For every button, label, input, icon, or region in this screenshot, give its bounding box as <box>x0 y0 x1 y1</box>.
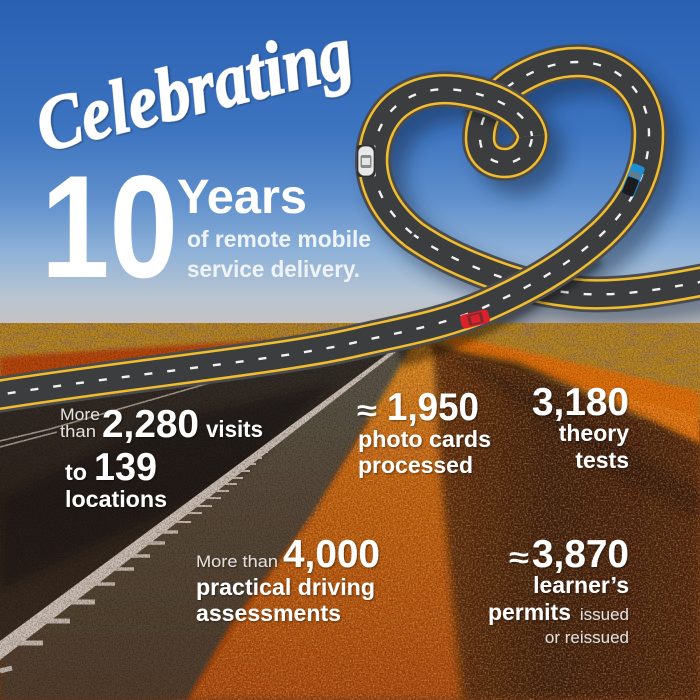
stat: practical driving assessments: More than <box>196 552 278 571</box>
stat: photo cards: processed <box>358 452 473 478</box>
stat: visits and locations: 2,280 <box>102 403 199 446</box>
subtitle: service delivery. <box>187 256 360 282</box>
stat: learner's permits: 3,870 <box>532 533 629 576</box>
dark tyre patch <box>0 385 330 590</box>
stat: photo cards: 1,950 <box>387 386 479 429</box>
road tail segment <box>373 160 700 294</box>
stat: learner's permits: permits <box>488 599 571 625</box>
stat: photo cards: ≈ <box>357 395 377 426</box>
subtitle <box>187 226 371 282</box>
stat: theory tests: 3,180 <box>532 381 629 424</box>
heading: Years: Years <box>177 171 307 224</box>
stat: theory tests: theory <box>559 420 629 446</box>
stat: visits and locations: visits <box>206 416 263 442</box>
icon: blue truck <box>621 163 645 197</box>
stat: learner's permits: ≈ <box>509 542 529 573</box>
stat: visits and locations <box>60 403 263 512</box>
stat: theory tests <box>532 381 629 473</box>
rumble strips <box>0 428 296 671</box>
stat: photo cards: photo cards <box>358 426 491 452</box>
dark gravel track <box>428 342 700 700</box>
stat: practical driving assessments: practical driving <box>196 574 375 600</box>
subtitle: of remote mobile <box>187 226 371 252</box>
stat: learner's permits: learner’s <box>533 572 629 598</box>
stat: visits and locations: More <box>60 405 100 424</box>
stat: visits and locations: 139 <box>94 446 157 489</box>
asphalt road <box>0 345 412 700</box>
stat: learner's permits: issued <box>580 605 629 624</box>
stat: practical driving assessments <box>196 533 380 626</box>
upper left lobe road segment <box>373 89 532 235</box>
stat: practical driving assessments: 4,000 <box>283 533 380 576</box>
orange gravel verge <box>170 345 460 700</box>
stat: learner's permits: or reissued <box>545 628 629 647</box>
scrub mottling <box>0 323 700 413</box>
road shadow <box>0 76 700 411</box>
icon: white car <box>357 145 375 177</box>
stat: visits and locations: locations <box>65 486 167 512</box>
icon: red car <box>459 309 491 329</box>
orange dirt band <box>440 336 700 445</box>
heading: Celebrating: Celebrating <box>28 9 361 168</box>
heading: 10: 10 <box>41 145 178 308</box>
stat: theory tests: tests <box>575 447 629 473</box>
stat: learner's permits <box>488 533 629 647</box>
stat: visits and locations: than <box>60 422 96 441</box>
stat: visits and locations: to <box>65 459 87 485</box>
white edge line <box>0 352 396 660</box>
centre road lines <box>0 382 213 447</box>
stat: photo cards <box>357 386 491 478</box>
main road segment <box>0 62 649 397</box>
heart-shaped road <box>0 62 700 397</box>
stat: practical driving assessments: assessments <box>196 600 341 626</box>
sky background <box>0 0 700 324</box>
gravel texture <box>0 323 700 700</box>
